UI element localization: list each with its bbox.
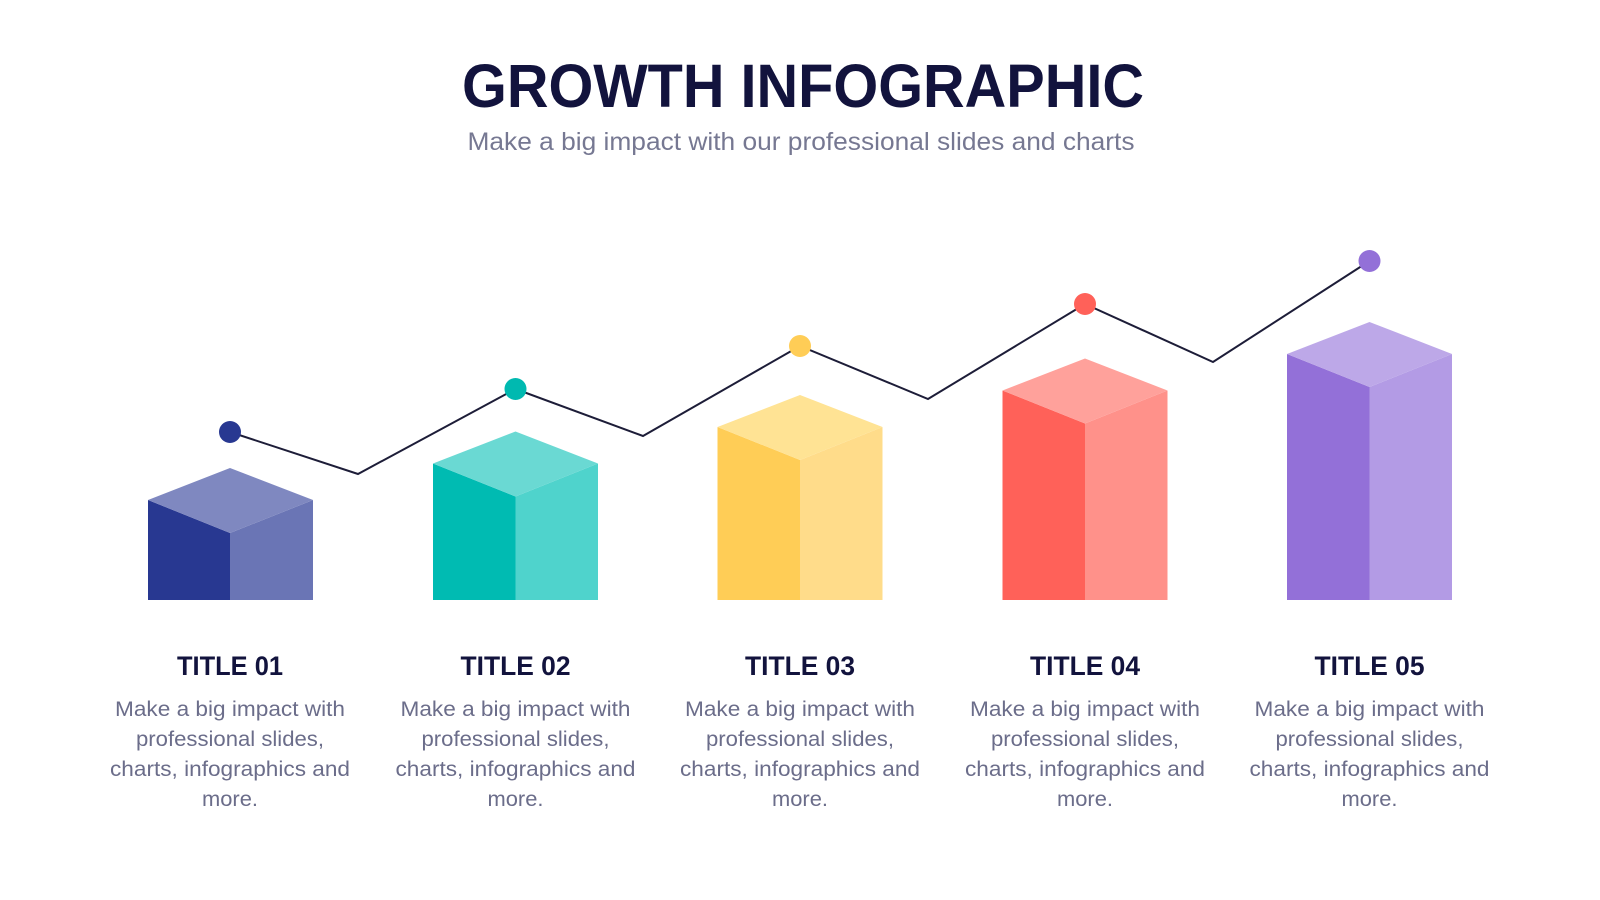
column text 4: Make a big impact with: [970, 698, 1200, 721]
column text 5: [1250, 651, 1490, 811]
column text 2: more.: [488, 788, 544, 811]
dot 2: [504, 378, 526, 400]
bar 5: [1287, 322, 1452, 600]
column text 5: charts, infographics and: [1250, 758, 1490, 781]
column text 1: Make a big impact with: [115, 698, 345, 721]
column text 1: TITLE 01: [177, 651, 283, 681]
column text 4: TITLE 04: [1030, 651, 1140, 681]
line chart: [219, 250, 1380, 474]
column text 3: charts, infographics and: [680, 758, 920, 781]
column text 3: [680, 651, 920, 811]
column text 3: TITLE 03: [745, 651, 855, 681]
column text 2: [396, 651, 636, 811]
subtitle: Make a big impact with our professional slides and charts: [468, 128, 1134, 156]
dot 1: [219, 421, 241, 443]
column text 4: more.: [1057, 788, 1113, 811]
bar 3: [718, 395, 882, 600]
column text 5: more.: [1342, 788, 1398, 811]
column text 4: charts, infographics and: [965, 758, 1205, 781]
column text 2: charts, infographics and: [396, 758, 636, 781]
column text 1: charts, infographics and: [110, 758, 350, 781]
column text 3: Make a big impact with: [685, 698, 915, 721]
bar 2: [433, 432, 598, 600]
dot 5: [1358, 250, 1380, 272]
column text 2: Make a big impact with: [400, 698, 630, 721]
column text 5: Make a big impact with: [1254, 698, 1484, 721]
dot 3: [789, 335, 811, 357]
bar 1: [148, 468, 313, 600]
column text 2: professional slides,: [422, 728, 610, 751]
dot 4: [1074, 293, 1096, 315]
column text 4: [965, 651, 1205, 811]
title: GROWTH INFOGRAPHIC: [462, 52, 1144, 120]
bar 4: [1002, 358, 1168, 600]
column text 3: professional slides,: [706, 728, 894, 751]
column text 4: professional slides,: [991, 728, 1179, 751]
column text 1: professional slides,: [136, 728, 324, 751]
column text 1: [110, 651, 350, 811]
column text 1: more.: [202, 788, 258, 811]
column text 5: professional slides,: [1276, 728, 1464, 751]
column text 5: TITLE 05: [1314, 651, 1424, 681]
column text 2: TITLE 02: [460, 651, 570, 681]
column text 3: more.: [772, 788, 828, 811]
